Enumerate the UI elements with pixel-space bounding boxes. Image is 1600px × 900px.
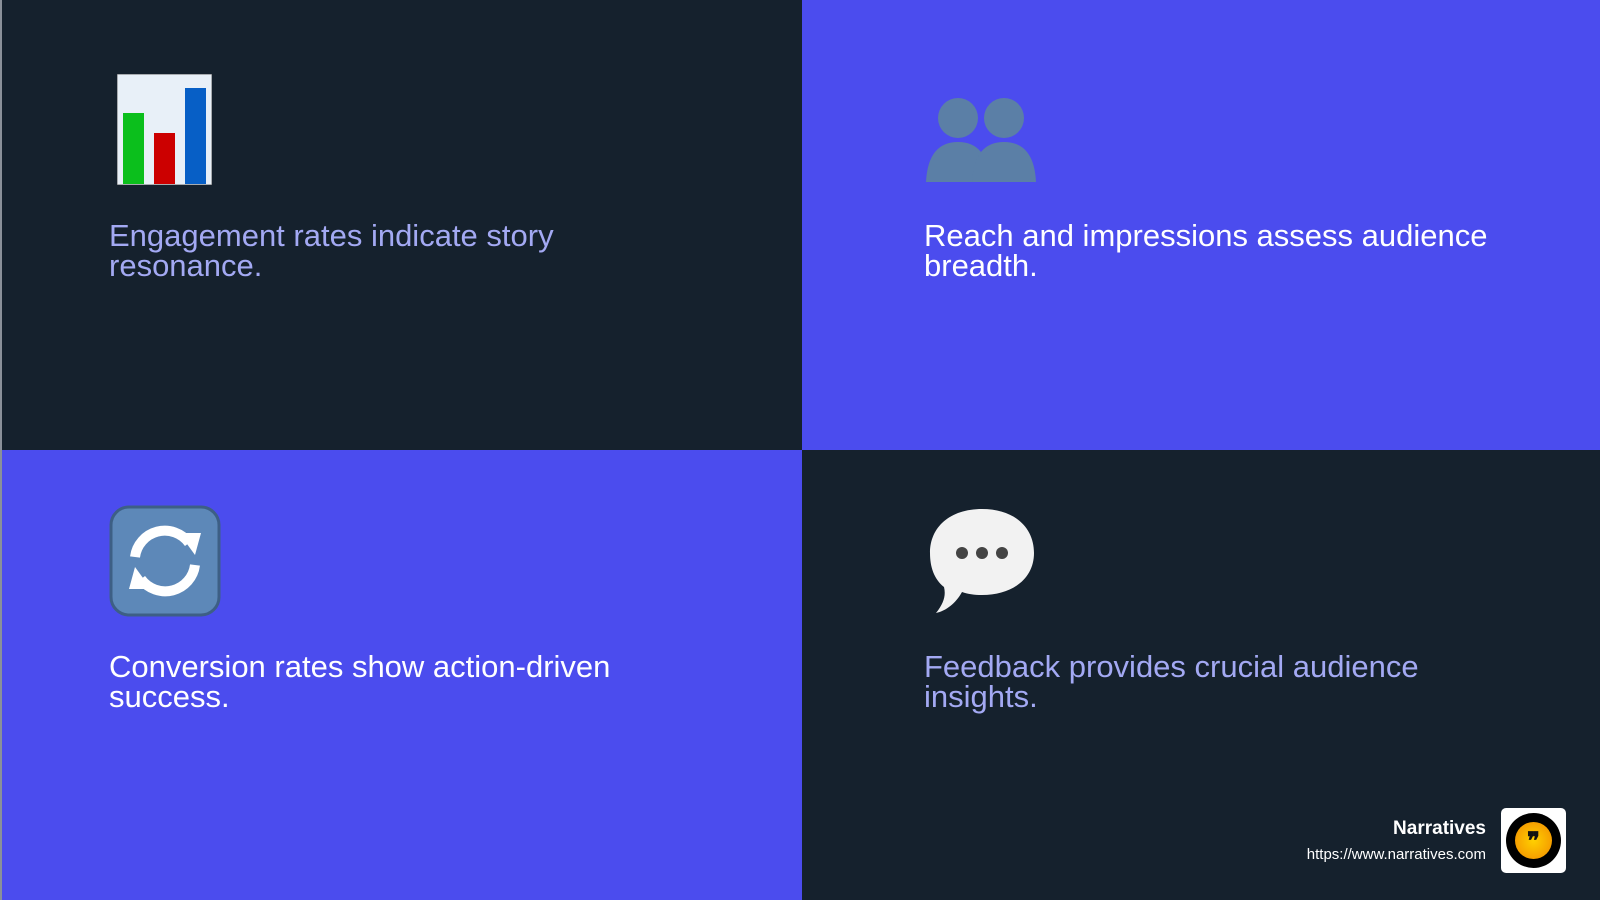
- icon: refresh: [110, 506, 220, 616]
- text: engagement: Engagement rates indicate story resonance.: [109, 218, 554, 283]
- logo: [1501, 808, 1566, 873]
- brand url: https://www.narratives.com: [1307, 846, 1486, 863]
- icon: people: [926, 98, 1036, 182]
- brand block: [1307, 808, 1566, 873]
- panel: engagement: [2, 0, 802, 450]
- panel: feedback: [802, 450, 1600, 900]
- text: feedback: Feedback provides crucial audience insights.: [924, 649, 1419, 714]
- text: reach: Reach and impressions assess audience breadth.: [924, 218, 1487, 283]
- text: conversion: Conversion rates show action-driven success.: [109, 649, 610, 714]
- panel: reach: [802, 0, 1600, 450]
- logo: ❞: [1527, 828, 1540, 855]
- panel: conversion: [2, 450, 802, 900]
- brand name: Narratives: [1393, 818, 1486, 839]
- icon: speech bubble: [930, 509, 1034, 613]
- icon: bar chart: [117, 74, 212, 185]
